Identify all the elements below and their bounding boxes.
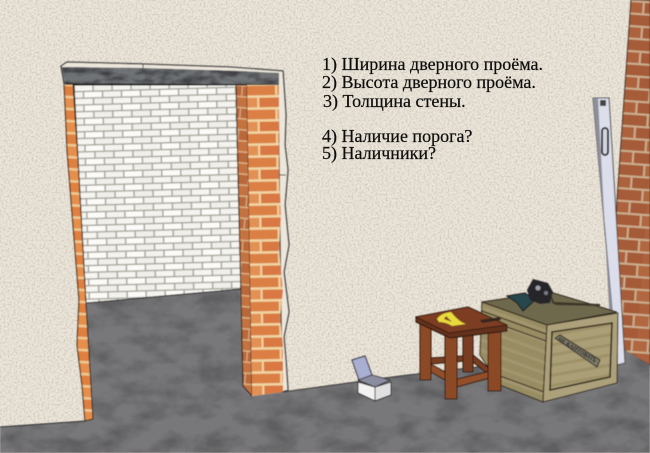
crate left face boards: [482, 311, 546, 392]
left door jamb: [64, 83, 93, 421]
concrete lintel: [61, 66, 280, 86]
crate label strap: НЕ КАНТОВАТЬ: [556, 337, 597, 364]
stool back legs: [431, 333, 490, 376]
crate inner panel: [550, 323, 612, 390]
crate left face: [480, 302, 547, 402]
stool seat: [416, 307, 507, 338]
checklist text: [322, 54, 543, 164]
crate top: [482, 292, 617, 325]
text: door opening height: 2) Высота дверного проёма.: [322, 72, 536, 93]
wooden crate: [480, 292, 618, 402]
text: wall thickness: 3) Толщина стены.: [323, 91, 466, 112]
crate right face: [543, 313, 618, 402]
right brick wall: [612, 0, 650, 365]
small tool on stool: [480, 317, 501, 323]
right jamb reveal: [236, 85, 252, 396]
spirit level: [593, 98, 625, 365]
drill and tools on crate: [507, 279, 600, 311]
small open box: [352, 356, 391, 401]
stool front legs: [420, 323, 501, 399]
plaster edge around opening: [61, 62, 289, 392]
text: door trim: 5) Наличники?: [322, 143, 436, 164]
text: threshold: 4) Наличие порога?: [322, 126, 472, 147]
right jamb front bricks: [247, 85, 283, 396]
text: door opening width: 1) Ширина дверного проёма.: [322, 54, 543, 75]
stool stretchers: [427, 362, 490, 387]
back wall white bricks: [74, 85, 241, 303]
wooden stool: [416, 307, 507, 399]
yellow set square: [437, 312, 466, 326]
